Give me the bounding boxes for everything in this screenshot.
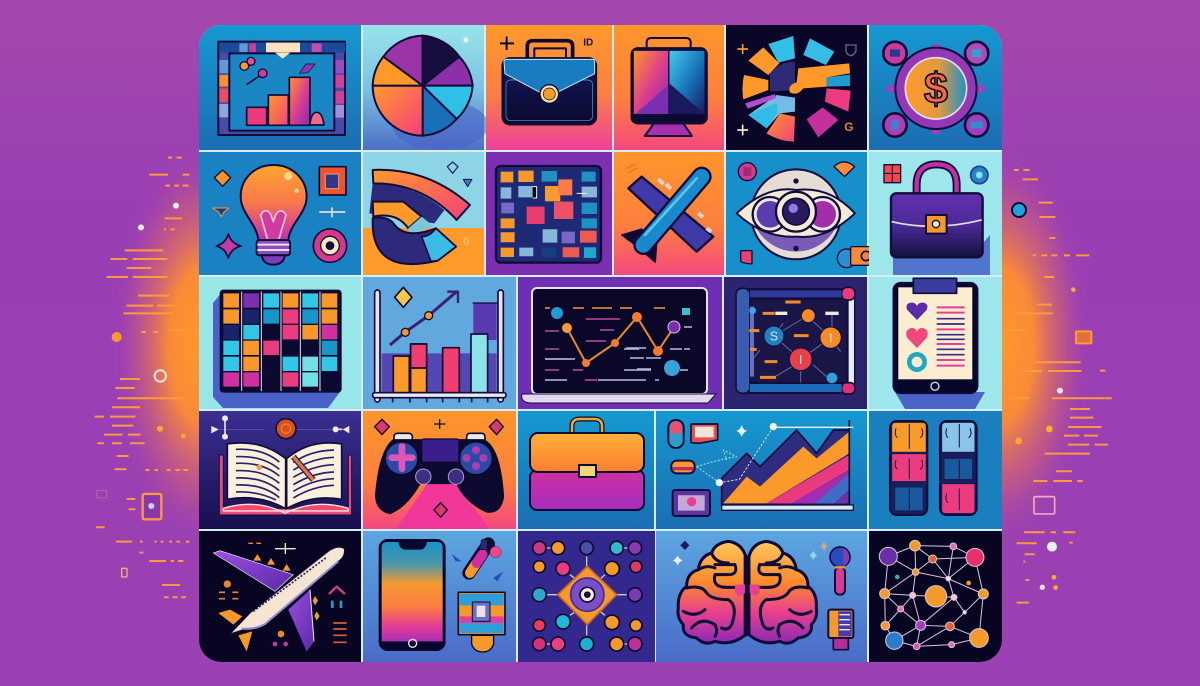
- tile: lightbulb: [199, 152, 361, 275]
- label: node letter S: S: [770, 330, 778, 344]
- left data dashes: [95, 158, 189, 597]
- tile: orange briefcase: [518, 411, 654, 529]
- label: dollar sign: $: [924, 65, 948, 113]
- tile: clipboard tablet: [869, 277, 1002, 409]
- right data dashes: [1007, 170, 1112, 603]
- tile: switch panels: [869, 411, 1002, 529]
- left small shapes: [97, 203, 186, 577]
- label: small mark: ID: [583, 37, 593, 48]
- label: zero mark: 0: [463, 236, 470, 248]
- left orange glow: [110, 140, 300, 550]
- tile: purple briefcase: [869, 152, 1002, 275]
- tile: board with bar chart: [199, 25, 361, 150]
- tile: open book: [199, 411, 361, 529]
- tile: airplane on dark: [199, 531, 361, 662]
- tile: airplane on orange: [614, 152, 724, 275]
- tile: eye emblem: [726, 152, 881, 275]
- icon grid board: [199, 25, 1002, 662]
- tile: growth bar chart: [363, 277, 516, 409]
- label: node letter I: I: [829, 331, 832, 345]
- tile: area chart with icons: [656, 411, 867, 529]
- tile: curved bands: [363, 152, 484, 275]
- tile: game controller: [363, 411, 516, 529]
- tile: pie chart: [363, 25, 488, 150]
- tile: gear with dollar: [869, 25, 1002, 150]
- tile: node diagram: [518, 531, 655, 662]
- right small shapes: [1012, 203, 1091, 590]
- tile: smartphone: [363, 531, 516, 662]
- tile: navy briefcase: [486, 25, 612, 150]
- tile: network graph: [869, 531, 1002, 662]
- tile: tile dashboard: [486, 152, 612, 275]
- tile: circuit board frame: [724, 277, 867, 409]
- tile: dark segmented dial: [726, 25, 867, 150]
- tile: split monitor: [614, 25, 724, 150]
- tile: laptop line chart: [518, 277, 722, 409]
- tile: brain: [656, 531, 867, 662]
- label: letter mark: G: [844, 120, 854, 134]
- label: node letter T: I: [799, 353, 802, 367]
- laptop screen: [532, 288, 707, 394]
- tile: color grid calendar: [199, 277, 361, 409]
- right orange glow: [903, 140, 1093, 550]
